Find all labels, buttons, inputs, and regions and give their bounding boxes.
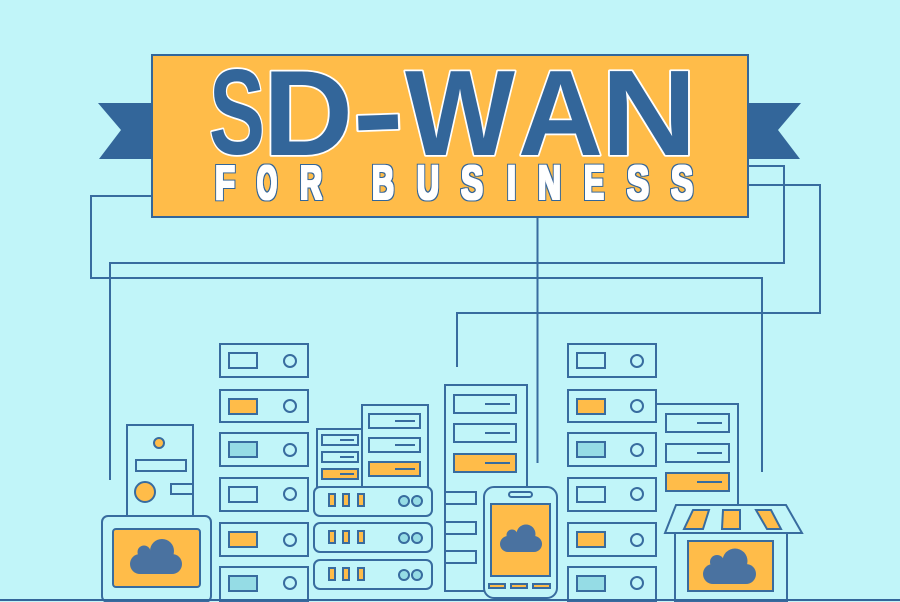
ground line [0, 599, 900, 601]
tall tower behind phone [445, 385, 527, 591]
title: SD-WAN: A [518, 45, 603, 181]
title banner [152, 55, 748, 217]
subtitle: FOR BUSINESS: I [507, 157, 516, 210]
title: SD-WAN: D [263, 45, 353, 181]
network connection lines [91, 166, 820, 480]
subtitle: FOR BUSINESS: S [671, 157, 693, 210]
icon: cloud on store [703, 548, 756, 584]
subtitle: FOR BUSINESS: U [417, 157, 439, 210]
server column: right [568, 344, 656, 602]
subtitle: FOR BUSINESS [215, 157, 693, 210]
subtitle: FOR BUSINESS: R [300, 157, 322, 210]
subtitle: FOR BUSINESS: F [215, 157, 235, 210]
title: SD-WAN: W [405, 45, 516, 181]
subtitle: FOR BUSINESS: N [538, 157, 561, 210]
small rack [317, 429, 362, 489]
smartphone with cloud [484, 487, 557, 598]
wide server units [314, 487, 432, 589]
subtitle: FOR BUSINESS: S [627, 157, 649, 210]
medium rack [362, 405, 428, 489]
subtitle: FOR BUSINESS: E [584, 157, 604, 210]
title: SD-WAN [209, 43, 697, 181]
desktop computer tower [127, 425, 193, 517]
ribbon: right tail [748, 103, 801, 159]
subtitle: FOR BUSINESS: B [372, 157, 394, 210]
store with cloud [665, 505, 802, 602]
subtitle: FOR BUSINESS: O [257, 157, 277, 210]
title: SD-WAN: N [601, 45, 697, 181]
ribbon: left tail [98, 103, 153, 159]
subtitle: FOR BUSINESS: S [461, 157, 483, 210]
icon: cloud on phone [500, 524, 542, 552]
monitor with cloud [102, 516, 211, 602]
rack behind store [656, 404, 738, 506]
title: SD-WAN: - [350, 43, 406, 181]
icon: cloud on monitor [130, 539, 182, 574]
server column: left [220, 344, 308, 602]
title: SD-WAN: S [209, 44, 265, 180]
